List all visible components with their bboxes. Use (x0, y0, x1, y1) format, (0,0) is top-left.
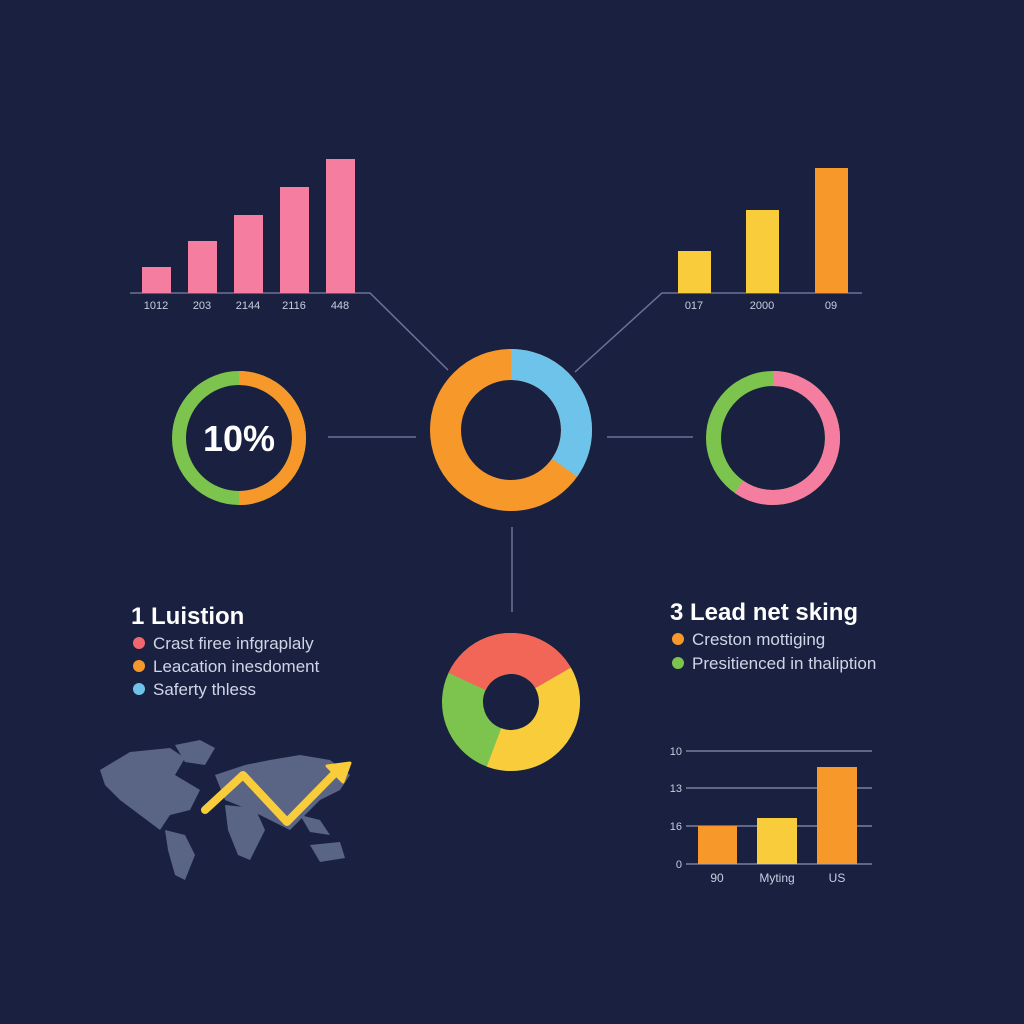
bar chart: bottom right: 16 (670, 821, 682, 833)
donut: left 10%: 10% (203, 418, 275, 459)
bar chart: top left: 1012 (144, 300, 168, 312)
bar chart: bottom right: US (829, 871, 845, 885)
bar chart: bottom right: Myting (759, 871, 795, 885)
text block: left legend: Crast firee infgraplaly (153, 634, 314, 653)
bar chart: top right: 2000 (750, 300, 774, 312)
text block: right legend: Creston mottiging (692, 630, 825, 649)
bar chart: top left: 448 (331, 300, 349, 312)
donut: left 10% (179, 378, 299, 498)
bar chart: top left: 2144 (236, 300, 260, 312)
text block: right legend (670, 599, 876, 673)
text block: left legend: Leacation inesdoment (153, 657, 320, 676)
world map (100, 740, 350, 880)
text block: left legend (131, 603, 320, 699)
bar chart: bottom right: 90 (710, 871, 724, 885)
bar chart: bottom right (670, 746, 872, 885)
donut: center (446, 364, 576, 496)
text block: right legend: Presitienced in thaliption (692, 654, 876, 673)
text block: left legend: Saferty thless (153, 680, 256, 699)
donut: bottom (447, 638, 575, 766)
bar chart: top right (678, 168, 848, 312)
donut: right (714, 378, 832, 498)
bar chart: bottom right: 10 (670, 746, 682, 758)
text block: left legend: 1 Luistion (131, 603, 244, 630)
trend arrow (205, 763, 350, 822)
bar chart: bottom right: 0 (676, 859, 682, 871)
connector lines (130, 293, 862, 612)
bar chart: top left: 203 (193, 300, 211, 312)
bar chart: top right: 09 (825, 300, 837, 312)
bar chart: top left (142, 159, 355, 312)
bar chart: bottom right: 13 (670, 783, 682, 795)
text block: right legend: 3 Lead net sking (670, 599, 858, 626)
bar chart: top right: 017 (685, 300, 703, 312)
bar chart: top left: 2116 (282, 300, 306, 312)
